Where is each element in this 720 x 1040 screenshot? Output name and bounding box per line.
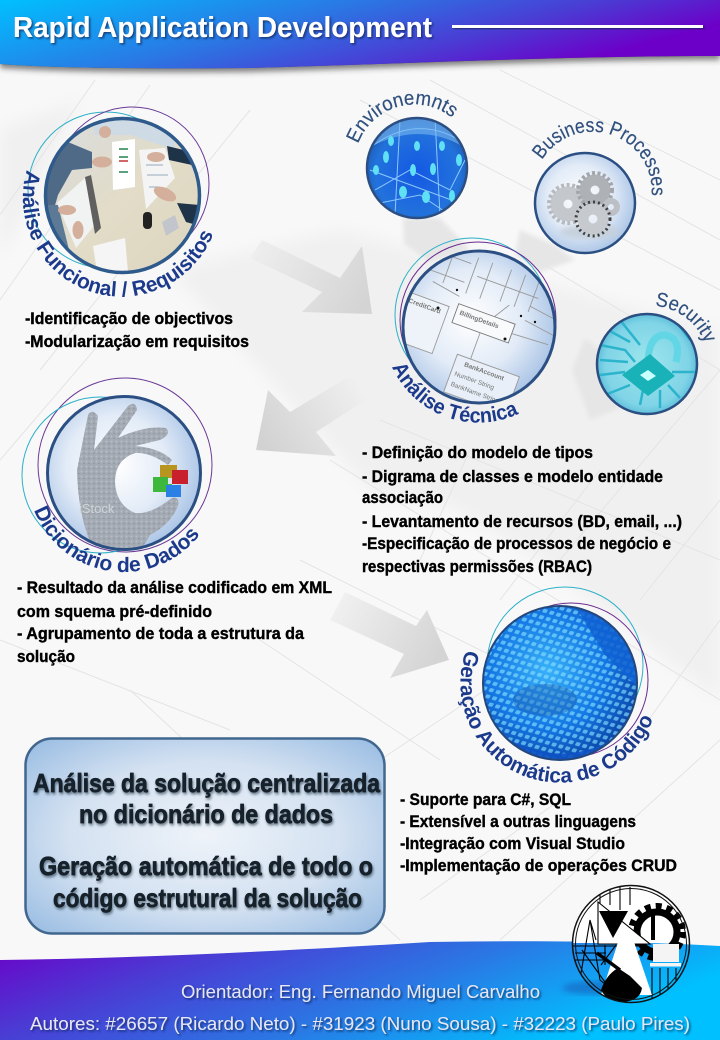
panel: análise técnica — [392, 238, 556, 423]
bullets: dicionário de dados: - Resultado da análise codificado em XML — [17, 579, 332, 597]
bullets: geração: -Integração com Visual Studio — [400, 835, 625, 853]
bullets: análise funcional: -Modularização em requisitos — [25, 333, 249, 351]
bullets: geração: - Suporte para C#, SQL — [400, 791, 571, 809]
panel: geração automática de código — [458, 586, 652, 783]
bullets: análise técnica: - Digrama de classes e modelo entidade — [362, 468, 663, 486]
panel: análise funcional — [22, 106, 212, 297]
summary callout: Geração automática de todo o — [39, 851, 373, 881]
circuit lock icon — [597, 314, 697, 414]
photo: meeting table — [47, 120, 198, 270]
hand with puzzle photo — [48, 396, 200, 552]
bullets: dicionário de dados: - Agrupamento de toda a estrutura da — [17, 625, 305, 643]
border — [48, 396, 200, 550]
curved label: Dicionário de Dados — [34, 505, 198, 572]
gears icon — [535, 153, 635, 253]
footer: autores: Autores: #26657 (Ricardo Neto) - #31923 (Nuno Sousa) - #32223 (Paulo Pires) — [30, 1013, 690, 1034]
panel: dicionário de dados — [22, 378, 212, 572]
header band — [0, 0, 720, 68]
border — [597, 314, 697, 414]
curved label: Security — [656, 292, 715, 340]
footer band — [0, 941, 720, 1040]
UML diagram photo: CreditCard — [407, 298, 441, 316]
globe network icon — [368, 119, 466, 217]
curved label: Análise Técnica — [392, 364, 519, 423]
UML diagram photo — [404, 252, 554, 401]
photo border — [46, 118, 200, 272]
hand with puzzle photo: iStock — [79, 501, 115, 516]
curved label: Análise Funcional / Requisitos — [22, 170, 212, 297]
panel: security — [596, 292, 715, 416]
bullets: análise técnica: respectivas permissões (RBAC) — [362, 558, 592, 576]
logo — [562, 885, 690, 1002]
bullets: análise técnica — [362, 444, 682, 576]
arrow: dicionário to geração — [330, 592, 449, 678]
UML diagram photo: BankAccount — [463, 361, 506, 383]
summary callout: no dicionário de dados — [79, 799, 333, 829]
border — [403, 251, 555, 403]
border — [367, 118, 467, 218]
summary callout — [26, 738, 384, 934]
UML diagram photo: Number String — [453, 371, 495, 392]
title: Rapid Application Development — [13, 12, 432, 44]
bullets: análise técnica: -Especificação de processos de negócio e — [362, 535, 671, 553]
bullets: análise técnica: - Definição do modelo de tipos — [362, 444, 593, 462]
bullets: dicionário de dados: com squema pré-definido — [17, 603, 212, 621]
soft shadows under satellite circles — [403, 218, 620, 420]
bullets: dicionário de dados: solução — [17, 648, 75, 666]
bullets: análise técnica: - Levantamento de recursos (BD, email, ...) — [362, 513, 682, 531]
bullets: análise funcional — [25, 310, 249, 351]
header rule — [452, 25, 703, 28]
panel: business processes — [532, 121, 663, 254]
bullets: análise funcional: -Identificação de objectivos — [25, 310, 233, 328]
orbit rings — [395, 238, 556, 398]
UML diagram photo: BankName String — [450, 381, 500, 405]
summary callout: Análise da solução centralizada — [33, 768, 380, 798]
orbit rings — [22, 378, 212, 553]
bullets: análise técnica: associação — [362, 489, 443, 507]
curved label: Environemnts — [346, 94, 457, 143]
orbit rings — [28, 107, 209, 268]
curved label: Geração Automática de Código — [458, 652, 652, 783]
arrow: análise técnica to dicionário — [256, 376, 372, 456]
panel: environments — [346, 94, 468, 220]
UML diagram photo: BillingDetails — [458, 310, 500, 331]
border — [483, 606, 637, 760]
summary callout: código estrutural da solução — [53, 883, 362, 913]
bullets: dicionário de dados — [17, 579, 332, 666]
footer: orientador: Orientador: Eng. Fernando Miguel Carvalho — [181, 981, 540, 1002]
curved label: Business Processes — [532, 121, 663, 196]
bullets: geração: -Implementação de operações CRUD — [400, 857, 677, 875]
bullets: geração — [400, 791, 677, 875]
code matrix photo — [483, 606, 640, 765]
arrow: requisitos to análise técnica — [250, 240, 372, 314]
orbit rings — [487, 587, 648, 757]
border — [535, 153, 635, 253]
bullets: geração: - Extensível a outras linguagens — [400, 813, 636, 831]
